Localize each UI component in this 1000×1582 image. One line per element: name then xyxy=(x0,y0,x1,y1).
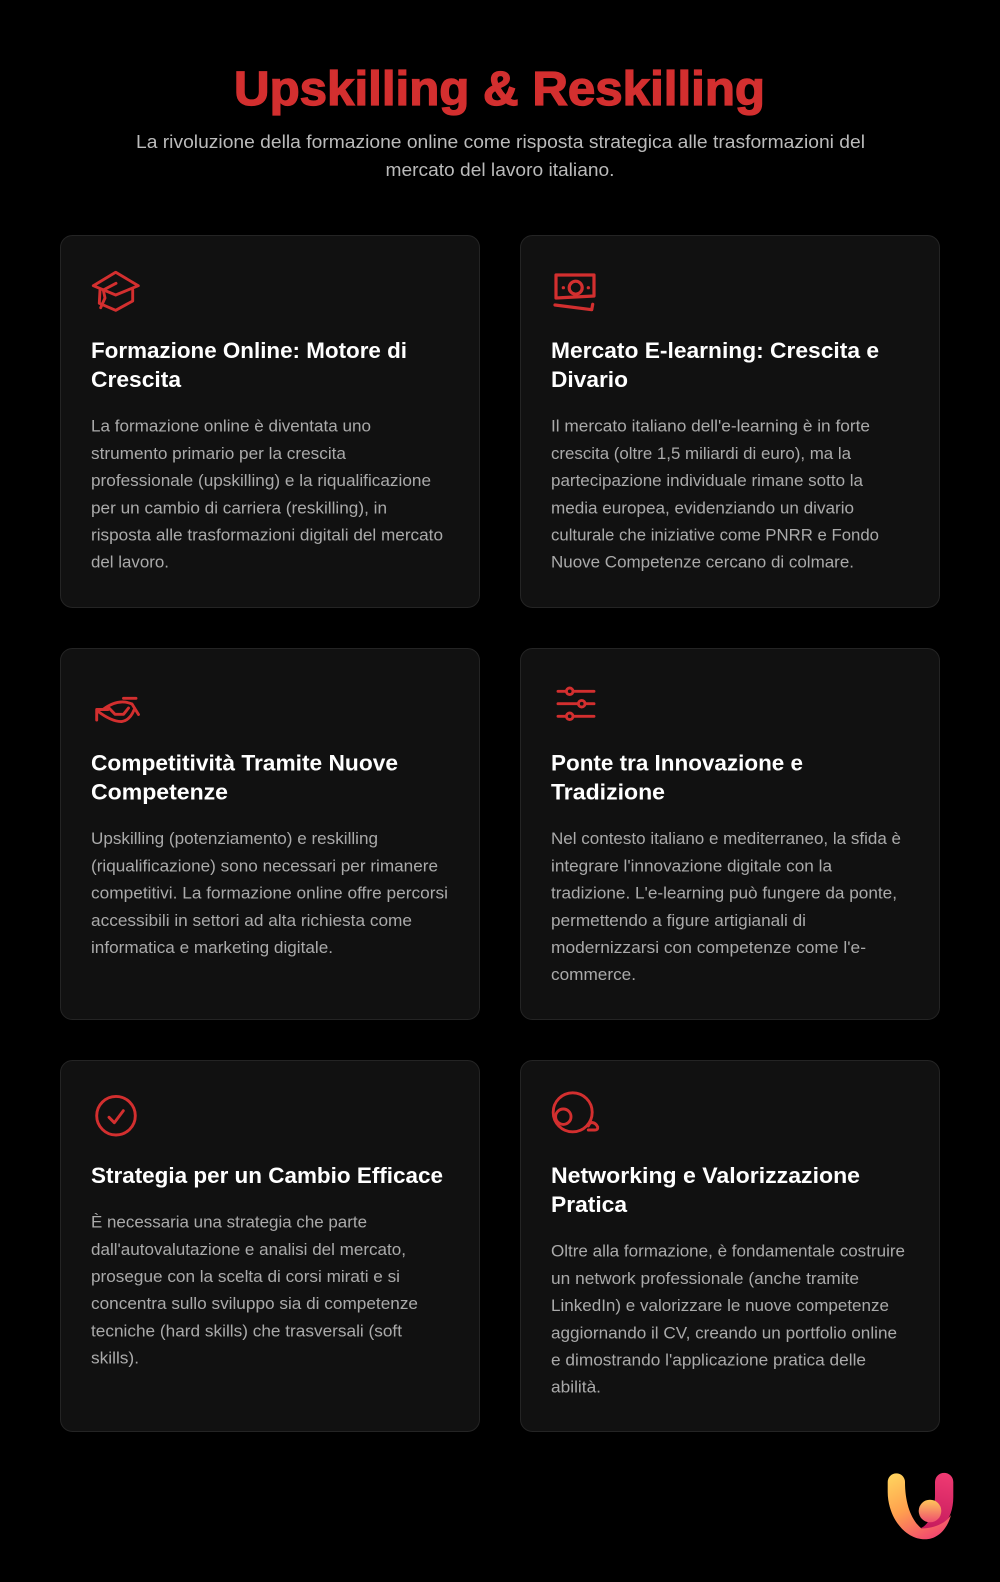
icon: graduation cap xyxy=(93,272,138,310)
text block: Nuove Competenze cercano di colmare. xyxy=(551,554,854,572)
panel: Strategia xyxy=(60,1060,480,1432)
text block: culturale che iniziative come PNRR e Fondo xyxy=(551,526,879,544)
text block: partecipazione individuale rimane sotto la xyxy=(551,472,864,490)
text block: risposta alle trasformazioni digitali del mercato xyxy=(91,526,443,544)
heading: Ponte tra Innovazione e xyxy=(551,750,803,776)
icon: logo xyxy=(888,1473,953,1539)
text block: integrare l'innovazione digitale con la xyxy=(551,857,833,875)
panel: Ponte xyxy=(520,648,940,1020)
text block: Nel contesto italiano e mediterraneo, la sfida è xyxy=(551,830,901,848)
text block: dall'autovalutazione e analisi del mercato, xyxy=(91,1241,406,1259)
text block: un network professionale (anche tramite xyxy=(551,1270,859,1288)
heading xyxy=(551,750,803,804)
heading: Competitività Tramite Nuove xyxy=(91,750,398,776)
icon: check circle xyxy=(97,1096,135,1135)
heading: Pratica xyxy=(551,1192,628,1217)
text block: skills). xyxy=(91,1350,139,1368)
heading: Divario xyxy=(551,367,628,392)
panel: Mercato E-learning xyxy=(520,236,940,608)
heading: Crescita xyxy=(91,367,182,392)
icon: sliders xyxy=(558,688,594,720)
text block: tecniche (hard skills) che trasversali (soft xyxy=(91,1322,402,1340)
text block: concentra sullo sviluppo sia di competenze xyxy=(91,1295,418,1313)
title: Upskilling & Reskilling xyxy=(234,63,765,116)
text block: La formazione online è diventata uno xyxy=(91,418,371,436)
text block: commerce. xyxy=(551,966,636,984)
subtitle: mercato del lavoro italiano. xyxy=(386,160,614,180)
icon: eye with arrow xyxy=(97,698,138,722)
text block: Upskilling (potenziamento) e reskilling xyxy=(91,830,378,848)
text block: Oltre alla formazione, è fondamentale costruire xyxy=(551,1243,905,1261)
text block: del lavoro. xyxy=(91,554,169,572)
panel: Networking xyxy=(520,1060,940,1432)
icon: banknote xyxy=(555,275,594,310)
heading: Competenze xyxy=(91,780,228,804)
heading xyxy=(551,338,879,392)
text block: LinkedIn) e valorizzare le nuove competenze xyxy=(551,1297,889,1315)
text block: competitivi. La formazione online offre percorsi xyxy=(91,885,448,903)
text block: professionale (upskilling) e la riqualificazione xyxy=(91,472,431,490)
heading: Formazione Online: Motore di xyxy=(91,338,407,363)
text block: strumento primario per la crescita xyxy=(91,445,347,463)
heading: Strategia per un Cambio Efficace xyxy=(91,1163,443,1188)
text block xyxy=(551,1243,905,1397)
text block: media europea, evidenziando un divario xyxy=(551,499,854,517)
text block xyxy=(91,1213,418,1368)
text block: aggiornando il CV, creando un portfolio online xyxy=(551,1324,897,1342)
text block: informatica e marketing digitale. xyxy=(91,939,333,957)
heading: Tradizione xyxy=(551,780,665,804)
text block: e dimostrando l'applicazione pratica delle xyxy=(551,1352,866,1370)
icon: network bubble xyxy=(553,1093,598,1132)
text block: permettendo a figure artigianali di xyxy=(551,912,806,930)
text block xyxy=(551,830,901,984)
text block: abilità. xyxy=(551,1379,601,1397)
text block: È necessaria una strategia che parte xyxy=(91,1213,367,1232)
heading xyxy=(551,1163,860,1217)
panel: Formazione Online xyxy=(60,236,480,608)
text block: tradizione. L'e-learning può fungere da ponte, xyxy=(551,885,897,903)
heading xyxy=(91,750,398,804)
text block xyxy=(551,418,879,572)
text block xyxy=(91,830,448,957)
text block xyxy=(91,418,443,572)
text block: crescita (oltre 1,5 miliardi di euro), ma la xyxy=(551,445,852,463)
text block: accessibili in settori ad alta richiesta come xyxy=(91,912,412,930)
subtitle xyxy=(136,132,865,180)
text block: modernizzarsi con competenze come l'e- xyxy=(551,939,866,957)
heading: Mercato E-learning: Crescita e xyxy=(551,338,879,363)
heading: Networking e Valorizzazione xyxy=(551,1163,860,1188)
text block: (riqualificazione) sono necessari per rimanere xyxy=(91,857,438,875)
heading xyxy=(91,338,407,392)
panel: Competitività xyxy=(60,648,480,1020)
text block: per un cambio di carriera (reskilling), in xyxy=(91,499,387,517)
text block: Il mercato italiano dell'e-learning è in forte xyxy=(551,418,870,436)
text block: prosegue con la scelta di corsi mirati e si xyxy=(91,1268,400,1286)
subtitle: La rivoluzione della formazione online come risposta strategica alle trasformazioni del xyxy=(136,132,865,152)
